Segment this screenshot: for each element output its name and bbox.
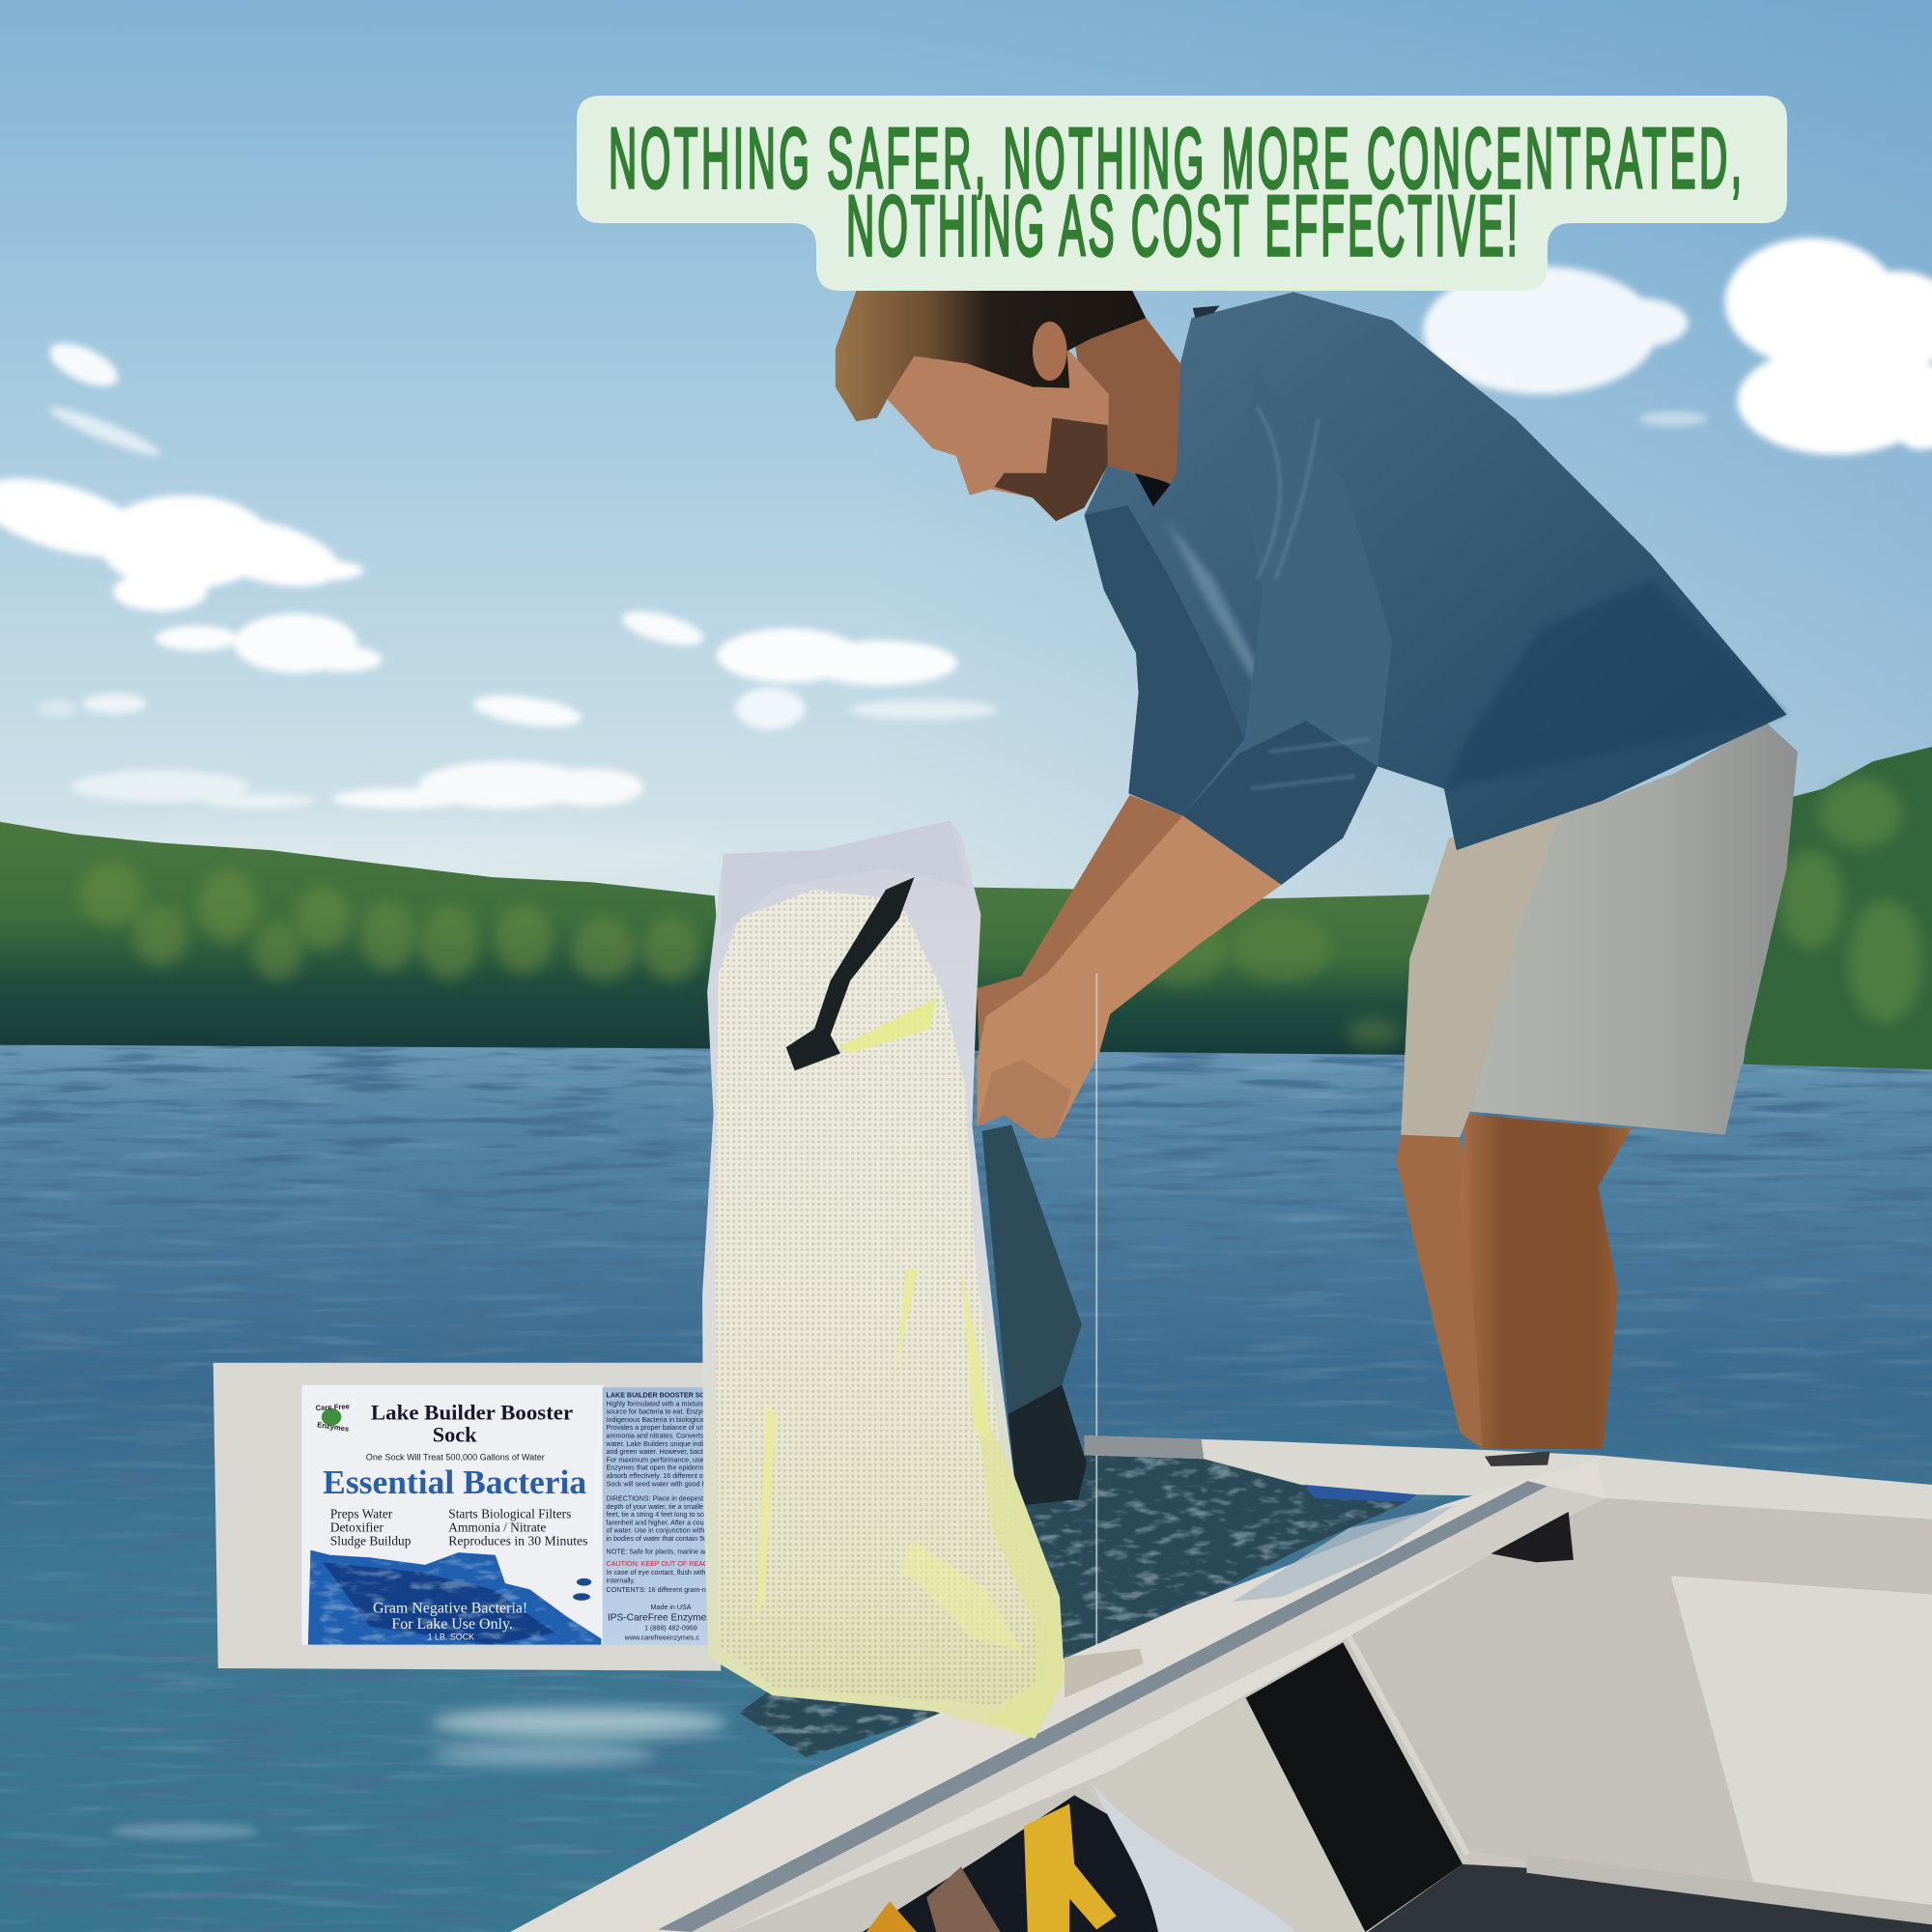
black strip xyxy=(1246,1642,1463,1932)
side panel text: DIRECTIONS: Place in deepest xyxy=(607,1495,703,1503)
side panel text: Made in USA xyxy=(650,1604,692,1611)
far forearm xyxy=(977,795,1182,1084)
centre cloud xyxy=(717,629,957,729)
hull base xyxy=(510,1460,1932,1932)
banner shape xyxy=(577,96,1787,291)
product name: Essential Bacteria xyxy=(323,1464,586,1501)
side panel text: In case of eye contact, flush with wa xyxy=(607,1569,717,1577)
side panel text: of water. Use in conjunction with xyxy=(607,1527,704,1535)
neck xyxy=(1072,318,1180,483)
horizon cloud xyxy=(332,761,643,809)
side panel text: Enzymes that open the epidermis xyxy=(607,1464,709,1472)
far tree line left xyxy=(0,822,727,1055)
benefits list: Reproduces in 30 Minutes xyxy=(448,1533,587,1548)
label title: Lake Builder Booster xyxy=(371,1400,573,1424)
lower left cloud xyxy=(156,613,382,672)
side panel text: CONTENTS: 16 different gram-nega xyxy=(607,1586,718,1594)
orange item xyxy=(867,1901,917,1932)
headline text: NOTHING SAFER, NOTHING MORE CONCENTRATED, xyxy=(609,110,1742,206)
beard xyxy=(994,417,1108,522)
side panel text xyxy=(607,1393,707,1641)
side panel text: internally. xyxy=(607,1577,636,1584)
suspension string xyxy=(1095,974,1097,1651)
label water splash xyxy=(305,1547,604,1647)
logo: Care Free Enzymes xyxy=(315,1402,350,1434)
side panel text: feet, tie a string 4 feet long to sock xyxy=(607,1511,712,1519)
side panel text: farenheit and higher. After a coup xyxy=(607,1519,708,1526)
weight: 1 LB. SOCK xyxy=(428,1633,474,1642)
lower shirt shadow xyxy=(1444,579,1786,788)
benefits list: Detoxifier xyxy=(330,1520,384,1534)
ear xyxy=(1033,322,1067,381)
lake water xyxy=(0,1045,1932,1932)
ledge xyxy=(1526,1855,1932,1924)
headline text: NOTHING AS COST EFFECTIVE! xyxy=(846,178,1518,273)
side panel text: Highly formulated with a mixture xyxy=(607,1400,704,1407)
headline text xyxy=(609,110,1742,273)
label title: Sock xyxy=(433,1422,477,1446)
big left cloud xyxy=(0,463,363,611)
near forearm and hand xyxy=(977,815,1282,1139)
white curved panel xyxy=(1093,1784,1296,1932)
face xyxy=(887,327,1109,522)
splash caption: For Lake Use Only. xyxy=(391,1616,513,1633)
right wall xyxy=(1347,1498,1932,1932)
plate xyxy=(1065,1649,1144,1698)
side panel text: www.carefreeenzymes.c xyxy=(624,1634,699,1642)
splash caption: Gram Negative Bacteria! xyxy=(373,1601,527,1617)
side panel text: and green water. However, bacte xyxy=(607,1448,707,1456)
black tie xyxy=(786,877,914,1070)
hair xyxy=(836,291,1146,421)
side panel text: ammonia and nitrates. Converts xyxy=(607,1433,704,1440)
brown item xyxy=(926,1866,1001,1932)
beige panel xyxy=(1084,1698,1365,1932)
side panel xyxy=(603,1387,711,1645)
sweater body xyxy=(1084,292,1786,885)
benefits list: Sludge Buildup xyxy=(330,1533,412,1548)
dark lower compartment xyxy=(863,1795,1171,1932)
yellow glove xyxy=(1024,1804,1117,1932)
near gunwale xyxy=(510,1460,1605,1932)
sky xyxy=(0,0,1932,936)
clouds left and centre xyxy=(0,334,998,884)
side panel text: depth of your water, tie a smaller xyxy=(607,1503,706,1511)
benefits list: Starts Biological Filters xyxy=(448,1506,571,1520)
rail stripe xyxy=(658,1481,1548,1932)
product box xyxy=(213,1363,721,1671)
far sleeve xyxy=(1084,505,1244,815)
man xyxy=(836,291,1798,1449)
sweater front highlight xyxy=(1164,518,1288,739)
undershirt collar xyxy=(1132,469,1171,506)
side panel text: absorb effectively. 16 different str xyxy=(607,1472,707,1480)
plastic bag xyxy=(702,820,1065,1739)
side panel text: water. Lake Builders unique indig xyxy=(606,1440,707,1448)
box body xyxy=(213,1363,721,1671)
rail notch xyxy=(1485,1452,1550,1466)
shorts beige panel xyxy=(1401,819,1559,1137)
side panel text: in bodies of water that contain 500 xyxy=(607,1535,711,1543)
benefits list: Ammonia / Nitrate xyxy=(448,1520,546,1534)
benefits list: Preps Water xyxy=(330,1506,393,1520)
side panel text: Indigenous Bacteria in biological xyxy=(607,1416,705,1424)
treat capacity line: One Sock Will Treat 500,000 Gallons of Water xyxy=(366,1452,545,1462)
sock body xyxy=(715,890,1047,1705)
side panel text: source for bacteria to eat. Enzymes xyxy=(607,1408,715,1416)
side panel text: IPS-CareFree Enzymes xyxy=(608,1612,711,1623)
side panel text: NOTE: Safe for plants, marine and xyxy=(607,1548,712,1555)
logo: Care Free Enzymes: Enzymes xyxy=(317,1420,350,1434)
inner post xyxy=(1347,1633,1467,1855)
label white area xyxy=(301,1385,604,1645)
dark wake water near boat xyxy=(740,1454,1406,1757)
side panel text: 1 (888) 482-0969 xyxy=(644,1624,697,1632)
side panel text: Provides a proper balance of units xyxy=(607,1424,711,1432)
tall trees right xyxy=(1743,747,1932,1074)
sunlit crowns xyxy=(79,862,701,980)
rail lower face shade xyxy=(692,1486,1605,1932)
clouds right xyxy=(1423,238,1932,455)
shorts grey panel xyxy=(1449,721,1798,1135)
gunwale highlight reflected sky xyxy=(1233,1506,1454,1602)
strap on shoulder xyxy=(1193,305,1220,318)
product sock in plastic bag xyxy=(702,820,1065,1739)
near sleeve shading xyxy=(1182,370,1392,885)
light panel xyxy=(1671,1576,1932,1909)
far tree line centre xyxy=(961,887,1430,1060)
headline banner xyxy=(577,96,1787,291)
logo: Care Free Enzymes: Care Free xyxy=(315,1402,350,1412)
side panel text: CAUTION: KEEP OUT OF REACH xyxy=(607,1560,713,1568)
left leg xyxy=(1396,1135,1482,1449)
bottom deck xyxy=(1368,1864,1932,1932)
boat xyxy=(510,1435,1932,1932)
dark mesh bag in water xyxy=(982,1125,1087,1506)
sweater fold lines xyxy=(1251,407,1370,788)
side panel text: For maximum performance, use xyxy=(607,1456,704,1463)
side panel text: Sock will seed water with good ba xyxy=(607,1480,710,1488)
side panel text: LAKE BUILDER BOOSTER SOCK xyxy=(607,1391,716,1399)
mesh texture xyxy=(715,890,1047,1705)
right leg xyxy=(1460,1114,1632,1449)
plastic top sheen xyxy=(721,820,967,936)
dark hatch xyxy=(1491,1512,1574,1562)
yellow sheen bottom xyxy=(974,1392,1065,1739)
wake sparkle xyxy=(740,1455,1397,1752)
far gunwale xyxy=(1084,1435,1932,1520)
